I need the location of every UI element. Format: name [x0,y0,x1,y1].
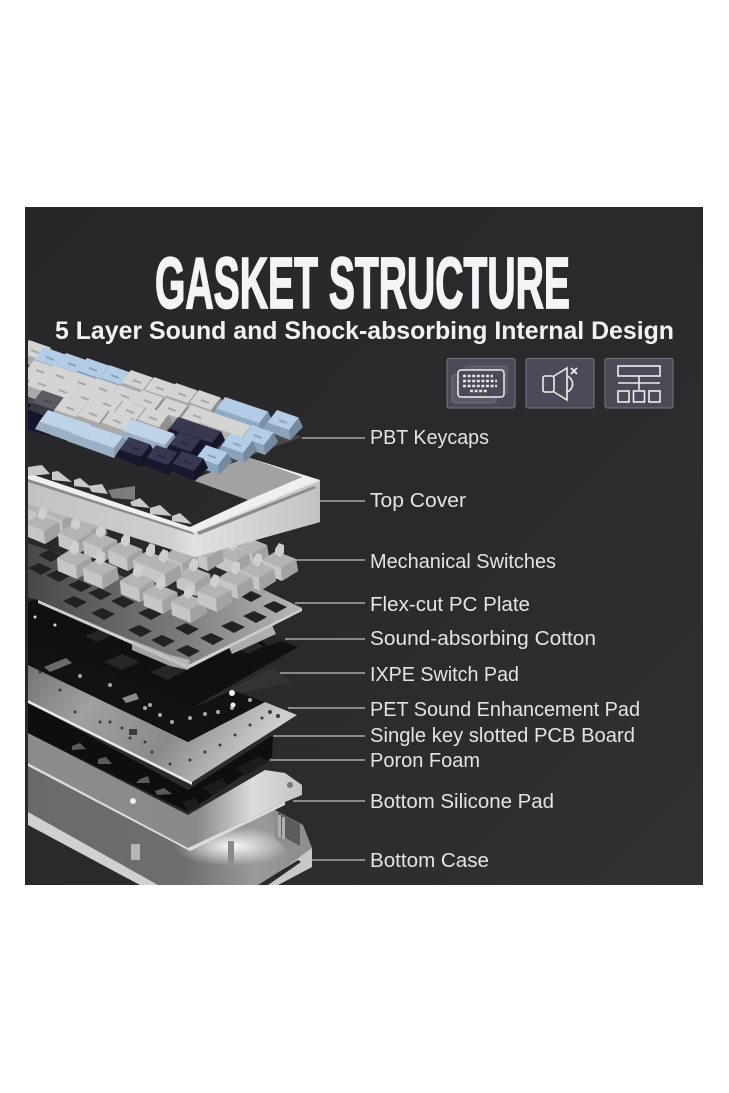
label: Top Cover: Top Cover [370,490,466,512]
icon: keyboard [447,358,515,408]
label: Bottom Case: Bottom Case [370,850,489,872]
background panel [25,207,703,885]
label: Single key slotted PCB Board: Single key slotted PCB Board [370,725,635,747]
icon: layer structure [605,358,673,408]
exploded keyboard [10,340,320,885]
layer: top cover [28,457,320,557]
layer: flex-cut PC plate [28,543,302,670]
layer: bottom case [28,765,312,885]
feature icons [447,358,673,408]
label: Bottom Silicone Pad: Bottom Silicone Pad [370,791,554,813]
label: IXPE Switch Pad: IXPE Switch Pad [370,664,519,686]
layer: sound-absorbing cotton [28,590,298,708]
subtitle: 5 Layer Sound and Shock-absorbing Internal Design [55,317,674,345]
layer: bottom silicone pad [28,733,302,851]
label: PET Sound Enhancement Pad: PET Sound Enhancement Pad [370,699,640,721]
leader lines [270,438,365,860]
component labels [370,427,640,872]
label: Mechanical Switches: Mechanical Switches [370,551,556,573]
label: Flex-cut PC Plate: Flex-cut PC Plate [370,594,530,616]
label: Sound-absorbing Cotton: Sound-absorbing Cotton [370,628,596,650]
icon: muted speaker [526,358,594,408]
label: Poron Foam: Poron Foam [370,750,480,772]
layer: PET sound enhancement pad [28,643,265,742]
layer: PBT keycaps [10,340,303,481]
layer: single key slotted PCB board [28,665,297,785]
layer: IXPE switch pad [204,668,291,702]
layer: mechanical switches [28,504,298,623]
label: PBT Keycaps: PBT Keycaps [370,427,489,449]
layer: poron foam [28,702,273,812]
